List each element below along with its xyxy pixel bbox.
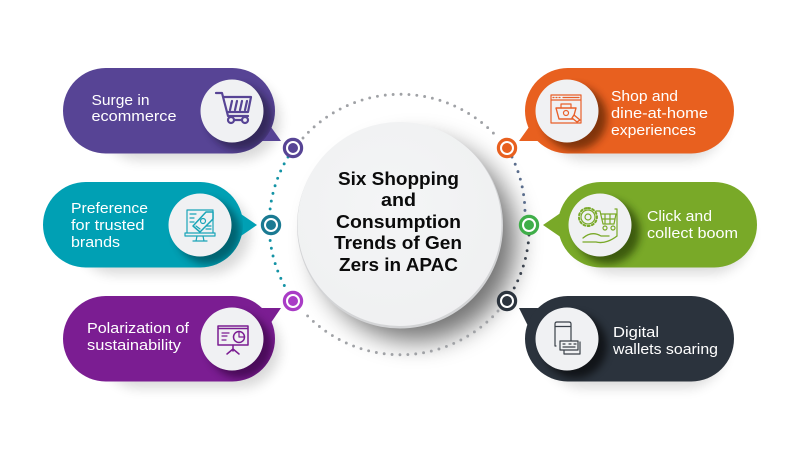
label [647,209,738,242]
icon: web basket [551,95,581,123]
central circle [297,122,503,328]
label: Surge in [92,93,150,109]
central circle shadow [316,141,516,341]
node: dark [498,292,516,310]
icon: gear, cart and hand [579,208,617,243]
panel: click and collect boom [543,182,757,274]
node: orange [498,139,516,157]
label: for trusted [71,218,144,234]
title [334,168,462,275]
label [71,201,148,251]
label: Click and [647,209,712,225]
panel: shop and dine-at-home experiences [519,68,734,160]
label: dine-at-home [611,106,708,122]
label [611,89,708,139]
node: magenta [284,292,302,310]
label: experiences [611,123,696,139]
label: Digital [613,325,659,341]
node: teal [262,216,280,234]
label: ecommerce [92,109,176,125]
label [87,321,190,354]
icon: phone and cards [555,322,580,354]
label: sustainability [87,338,182,354]
label: wallets soaring [612,342,718,358]
title: Trends of Gen [334,232,462,253]
panel: digital wallets soaring [519,296,734,388]
label: Polarization of [87,321,190,337]
title: Six Shopping [338,168,459,189]
label [612,325,718,358]
panel: polarization of sustainability [63,296,281,388]
panel: preference for trusted brands [43,182,257,274]
label [92,93,176,125]
title: and [381,189,416,210]
label: Shop and [611,89,678,105]
title: Consumption [336,211,461,232]
icon: presentation board [218,326,248,354]
panel: surge in ecommerce [63,68,281,160]
node: green [520,216,538,234]
label: Preference [71,201,148,217]
node: purple [284,139,302,157]
label: brands [71,235,120,251]
label: collect boom [647,226,738,242]
icon: price tag on monitor [185,210,215,241]
title: Zers in APAC [339,254,458,275]
dotted ring [269,94,529,355]
icon: shopping cart [216,93,251,123]
